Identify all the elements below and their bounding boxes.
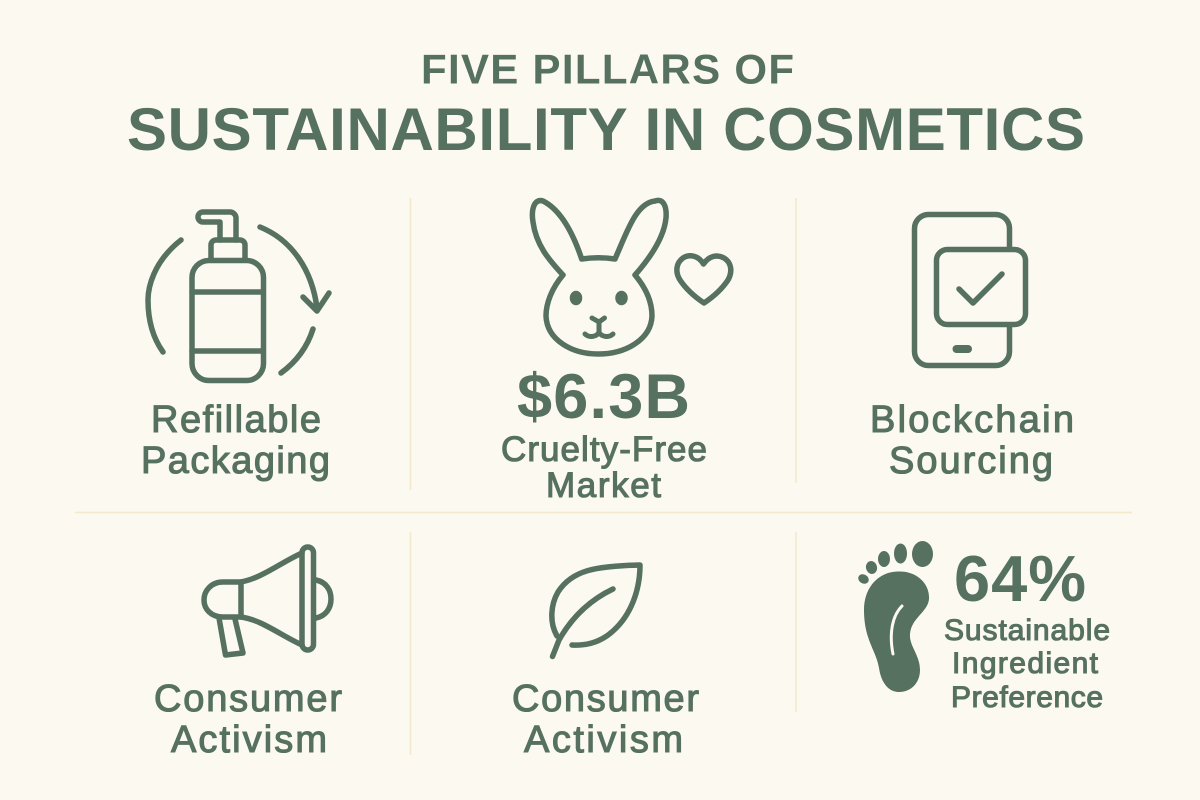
panel: consumer activism megaphone [154, 547, 342, 761]
label: blockchain sourcing [870, 399, 1074, 482]
icon: rabbit head [532, 200, 666, 354]
title [127, 46, 1085, 163]
icon: refillable pump bottle with cycle arrows [148, 212, 329, 380]
label: consumer activism [154, 678, 342, 761]
label: sustainable ingredient preference [944, 614, 1110, 714]
label: refillable packaging [141, 399, 330, 482]
label: sustainable ingredient preference: Ingredient [952, 647, 1099, 680]
label: consumer activism: Consumer [154, 678, 342, 720]
label: blockchain sourcing: Sourcing [889, 440, 1053, 482]
label: cruelty-free market: Cruelty-Free [501, 430, 707, 469]
label: consumer activism [512, 678, 699, 761]
stat: $6.3B: $6.3B [517, 362, 690, 432]
label: refillable packaging: Packaging [141, 440, 330, 482]
panel: sustainable ingredient preference [856, 541, 1110, 714]
icon: leaf [552, 565, 640, 656]
label: cruelty-free market: Market [546, 466, 661, 505]
panel: cruelty-free market [501, 200, 731, 505]
title line 1: FIVE PILLARS OF [421, 46, 794, 92]
label: refillable packaging: Refillable [151, 399, 321, 441]
panel: consumer activism leaf [512, 565, 699, 761]
panel: blockchain sourcing [870, 214, 1074, 482]
label: consumer activism: Consumer [512, 678, 699, 720]
panel: refillable packaging [141, 212, 330, 482]
label: blockchain sourcing: Blockchain [870, 399, 1074, 441]
label: consumer activism: Activism [524, 719, 683, 761]
icon: megaphone [204, 547, 331, 655]
stat: 64%: 64% [954, 542, 1086, 615]
label: sustainable ingredient preference: Preference [951, 681, 1103, 714]
label: cruelty-free market [501, 430, 707, 505]
title line 2: SUSTAINABILITY IN COSMETICS [127, 96, 1085, 163]
icon: phone with verified check [914, 214, 1026, 366]
icon: heart [677, 256, 731, 303]
icon: footprint [856, 541, 933, 692]
label: consumer activism: Activism [171, 719, 327, 761]
label: sustainable ingredient preference: Sustainable [944, 614, 1110, 647]
